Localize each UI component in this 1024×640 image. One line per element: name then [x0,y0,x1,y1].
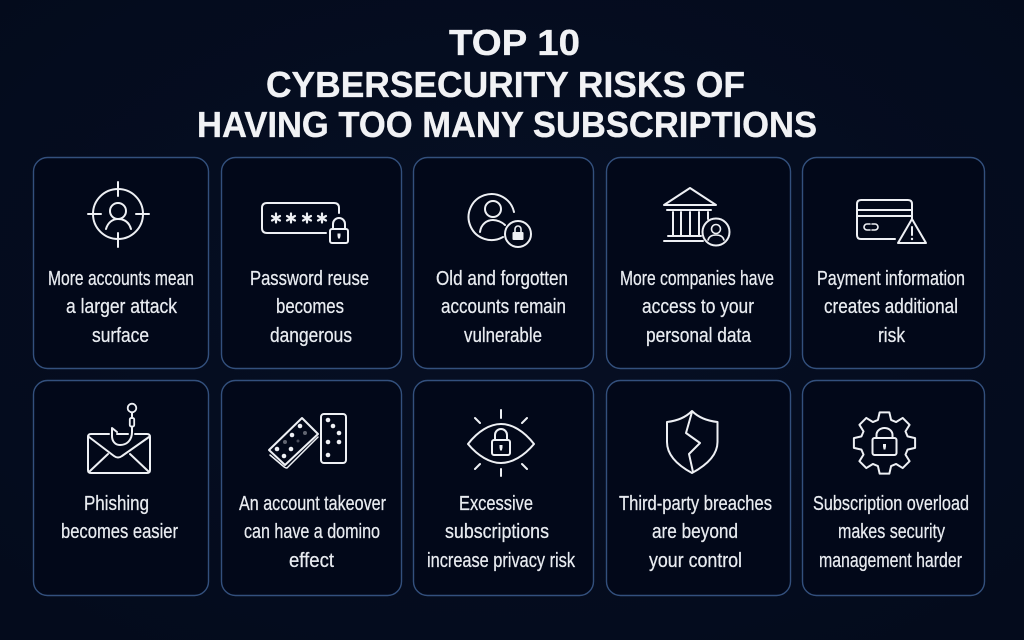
text: risk 10: Subscription overload [813,493,969,515]
icon: envelope with hook [88,404,150,473]
title [197,22,817,145]
text: risk 4 [620,268,774,347]
icon: password field with lock [262,203,348,243]
text: risk 9 [619,493,772,572]
text: risk 9: Third-party breaches [619,493,772,515]
text: risk 9: are beyond [652,521,738,543]
text: risk 7: can have a domino [244,521,380,543]
icon: bank with user [664,188,730,246]
panel: third-party breaches [606,380,790,596]
text: risk 2 [250,268,369,347]
text: risk 1: More accounts mean [48,268,194,290]
text: risk 2: dangerous [270,325,352,347]
icon: target on person [88,182,149,247]
panel: privacy risk [414,380,594,596]
icon: user circle with lock [469,194,531,247]
text: risk 6: becomes easier [61,521,178,543]
icon: dominoes [269,414,346,468]
text: risk 2: becomes [276,296,344,318]
panel: forgotten accounts [414,158,594,368]
panel: phishing [34,380,208,596]
text: risk 4: personal data [646,325,752,347]
icon: cracked shield [667,411,718,473]
text: risk 6: Phishing [84,493,149,515]
text: risk 8: subscriptions [445,521,549,543]
text: risk 9: your control [649,550,742,572]
text: risk 5: risk [878,325,906,347]
text: risk 8: Excessive [459,493,533,515]
text: risk 1: a larger attack [66,296,178,318]
text: risk 6 [61,493,178,543]
panel: account takeover [222,380,402,596]
text: risk 5 [817,268,965,347]
panel: subscription overload [802,380,984,596]
text: risk 8: increase privacy risk [427,550,576,572]
panel: larger attack surface [34,158,208,368]
text: risk 10: makes security [838,521,945,543]
text: risk 1: surface [92,325,149,347]
text: risk 10 [813,493,969,572]
text: risk 3 [436,268,568,347]
text: risk 4: access to your [642,296,754,318]
text: risk 3: Old and forgotten [436,268,568,290]
icon: card with warning [857,200,926,243]
text: risk 10: management harder [819,550,962,572]
text: risk 7 [239,493,386,572]
text: risk 1 [48,268,194,347]
title: HAVING TOO MANY SUBSCRIPTIONS [197,104,817,145]
text: risk 4: More companies have [620,268,774,290]
text: risk 2: Password reuse [250,268,369,290]
panel: companies with access [606,158,790,368]
text: risk 7: An account takeover [239,493,386,515]
text: risk 8 [427,493,576,572]
text: risk 3: accounts remain [441,296,566,318]
icon: eye with lock [468,410,534,476]
text: risk 5: creates additional [824,296,958,318]
text: risk 7: effect [289,550,334,572]
title: CYBERSECURITY RISKS OF [266,64,745,105]
panel: password reuse [222,158,402,368]
text: risk 5: Payment information [817,268,965,290]
title: TOP 10 [449,22,580,63]
icon: gear with lock [854,412,915,474]
text: risk 3: vulnerable [464,325,542,347]
panel: payment information [802,158,984,368]
